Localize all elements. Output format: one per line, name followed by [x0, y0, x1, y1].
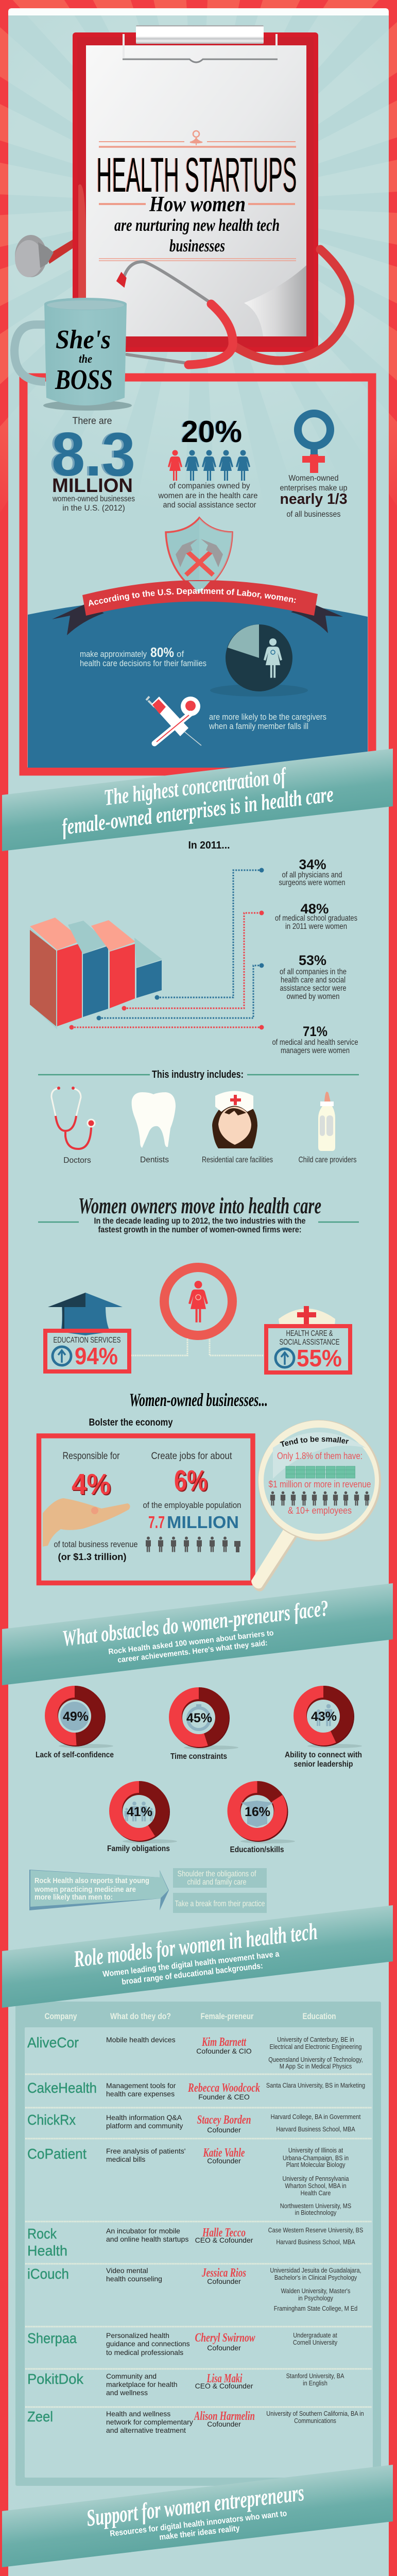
stat: 53 percent: health care and social — [281, 976, 346, 985]
row: copatient: Health Care — [301, 2190, 331, 2197]
text: caregivers: when a family member falls ill — [209, 721, 308, 731]
blue dome — [28, 598, 368, 768]
row: rock health: Halle Tecco — [202, 2226, 246, 2240]
stat: 4 percent: Responsible for — [63, 1451, 120, 1462]
row: cakehealth — [27, 2080, 365, 2101]
row: chickrx: Health information Q&A — [106, 2113, 182, 2122]
stat: nearly one third: Women-owned — [288, 474, 339, 483]
table header — [44, 2011, 336, 2021]
row: zeel — [27, 2409, 364, 2434]
stat: 34 percent: of all physicians and — [282, 871, 342, 879]
row: sherpaa: guidance and connections — [106, 2340, 190, 2348]
donut chart: senior leadership 43 percent — [295, 1687, 362, 1748]
icon: tooth — [132, 1092, 176, 1148]
stat: 6 percent: 7.7 — [148, 1513, 165, 1532]
callout: shoulder obligations — [173, 1868, 267, 1888]
callout: health care and social assistance: HEALTH CARE & — [286, 1329, 333, 1338]
stat: 34 percent: 34% — [299, 857, 326, 872]
clipboard — [73, 25, 318, 352]
metal clip — [123, 25, 278, 62]
row: rock health: Harvard Business School, MBA — [276, 2239, 355, 2246]
callout: health care and social assistance — [266, 1306, 350, 1372]
row: chickrx: Harvard College, BA in Government — [271, 2113, 361, 2121]
row: alivecor: Electrical and Electronic Engineering — [269, 2043, 362, 2050]
banner: role models: broad range of educational backgrounds: — [122, 1961, 264, 1987]
row: zeel: University of Southern California, BA in — [266, 2410, 364, 2417]
row: icouch: Jessica Rios — [201, 2266, 246, 2280]
banner: support for women entrepreneurs — [2, 2465, 393, 2567]
label: family obligations: Family obligations — [107, 1844, 170, 1853]
stat: 80 percent of decisions — [80, 645, 206, 668]
stat: 34 percent — [279, 857, 345, 887]
row: copatient: Wharton School, MBA in — [285, 2182, 347, 2190]
text: total business revenue — [54, 1539, 138, 1562]
row: pokitdok: Lisa Maki — [206, 2372, 243, 2385]
heading: women-owned businesses: Women-owned businesses... — [129, 1389, 268, 1410]
icon: baby bottle — [318, 1092, 335, 1151]
stat: 20 percent — [158, 415, 257, 510]
heading: women owners move into health care — [38, 1193, 359, 1234]
mug text — [55, 325, 113, 395]
title block — [96, 131, 297, 261]
row: chickrx: Stacey Borden — [197, 2113, 251, 2127]
stat: 48 percent: in 2011 were women — [285, 922, 347, 931]
row: sherpaa: to medical professionals — [106, 2348, 183, 2357]
row: cakehealth: Management tools for — [106, 2081, 176, 2090]
stat: 53 percent: owned by women — [286, 992, 340, 1001]
page curl — [244, 265, 306, 336]
icon: crossed syringe and thermometer — [146, 697, 201, 745]
stat: 53 percent: of all companies in the — [280, 968, 347, 976]
row: rock health: Health — [27, 2243, 67, 2259]
stat: nearly one third: enterprises make up — [280, 484, 347, 493]
row: copatient: Urbana-Champaign, BS in — [283, 2155, 349, 2162]
donut chart: senior leadership 43 percent: 43% — [311, 1709, 337, 1724]
callout: shoulder obligations: child and family care — [187, 1878, 247, 1887]
row: icouch: Bachelor's in Clinical Psychology — [274, 2274, 357, 2281]
icon: up arrow — [275, 1349, 294, 1367]
row: copatient: CoPatient — [27, 2146, 87, 2162]
row: rock health: Rock — [27, 2226, 57, 2242]
row: alivecor: AliveCor — [27, 2035, 79, 2050]
table header: Female-preneur — [201, 2011, 254, 2021]
pictogram: seven money stacks — [286, 1466, 355, 1478]
row: chickrx: Harvard Business School, MBA — [276, 2126, 355, 2133]
row: chickrx — [27, 2112, 361, 2134]
stat: 80 percent of decisions: 80% — [150, 645, 174, 660]
label: doctors: Doctors — [63, 1156, 91, 1165]
row: sherpaa: Undergraduate at — [293, 2332, 337, 2339]
stat: 80 percent of decisions: of — [177, 649, 184, 659]
row: pokitdok: in English — [303, 2380, 327, 2387]
row: sherpaa: Personalized health — [106, 2331, 169, 2340]
row: copatient: Northwestern University, MS — [280, 2202, 351, 2210]
row: rock health: Case Western Reserve University, BS — [268, 2227, 363, 2234]
donut chart: education skills 16 percent: 16% — [245, 1805, 270, 1819]
row: cakehealth: health care expenses — [106, 2090, 175, 2098]
row: copatient: Cofounder — [207, 2157, 241, 2165]
ribbon: according to the department of labor: According to the U.S. Department of Labor, women: — [89, 588, 296, 606]
row: sherpaa: Cofounder — [207, 2344, 241, 2352]
label: time constraints: Time constraints — [170, 1752, 227, 1761]
row: pokitdok: PokitDok — [27, 2371, 84, 2387]
donut chart: education skills 16 percent — [229, 1782, 295, 1843]
label: dentists: Dentists — [140, 1156, 169, 1164]
icon: magnifying glass: Tend to be smaller — [280, 1436, 349, 1447]
stat: 71 percent: managers were women — [281, 1046, 350, 1055]
row: rock health: CEO & Cofounder — [195, 2236, 253, 2244]
stat: 48 percent: 48% — [301, 901, 329, 917]
row: icouch — [27, 2266, 361, 2312]
stat: 20 percent: 20% — [181, 415, 242, 449]
label: education skills: Education/skills — [230, 1845, 284, 1854]
stat: 80 percent of decisions: make approximately — [80, 649, 147, 659]
banner: what obstacles — [2, 1583, 393, 1685]
mug text: BOSS — [55, 364, 113, 395]
subheading: How women — [149, 193, 246, 216]
icon: magnifying glass: $1 million or more in revenue — [269, 1479, 371, 1489]
row: pokitdok — [27, 2371, 344, 2397]
row: alivecor: Queensland University of Technology, — [268, 2056, 363, 2063]
icon: female symbol divider top — [99, 131, 296, 147]
callout: education services: 94% — [75, 1343, 118, 1369]
callout arrow: rock health also reports — [29, 1870, 169, 1910]
icon: stethoscope — [51, 1087, 95, 1149]
row: icouch: Video mental — [106, 2266, 148, 2275]
stat: 6 percent — [143, 1451, 241, 1532]
row: copatient: Free analysis of patients' — [106, 2147, 185, 2155]
callout: health care and social assistance: SOCIAL ASSISTANCE — [279, 1338, 340, 1347]
banner: highest concentration — [2, 749, 393, 851]
subheading: are nurturing new health tech — [114, 216, 280, 235]
stat: 20 percent: of companies owned by — [169, 482, 250, 490]
table header: Education — [303, 2011, 336, 2021]
banner: role models — [2, 1905, 393, 2008]
label: senior leadership: senior leadership — [294, 1760, 353, 1769]
row: cakehealth: Rebecca Woodcock — [187, 2081, 260, 2095]
banner: role models: Women leading the digital health movement have a — [102, 1950, 280, 1979]
donut chart: family obligations 41 percent — [110, 1782, 177, 1843]
row: alivecor — [27, 2035, 363, 2070]
row: pokitdok: Stanford University, BA — [286, 2372, 344, 2380]
row: chickrx: Cofounder — [207, 2126, 241, 2134]
row: chickrx: platform and community — [106, 2122, 183, 2130]
stat: 8.3 million: There are — [72, 416, 112, 427]
stat: 20 percent: women are in the health care — [158, 492, 257, 500]
row: alivecor: M App Sc in Medical Physics — [280, 2063, 352, 2070]
donut chart: family obligations 41 percent: 41% — [127, 1805, 152, 1819]
icon: magnifying glass: Only 1.8% of them have: — [277, 1451, 363, 1461]
text: caregivers: are more likely to be the caregivers — [209, 712, 326, 722]
heading: bolster the economy: Bolster the economy — [89, 1417, 173, 1428]
ribbon: according to the department of labor — [52, 580, 343, 635]
icon: woman in pie — [264, 638, 282, 678]
donut chart: time constraints 45 percent — [170, 1688, 238, 1750]
callout arrow: rock health also reports: women practicing medicine are — [34, 1885, 136, 1894]
row: cakehealth: CakeHealth — [27, 2080, 97, 2096]
panel: bolster the economy — [39, 1436, 253, 1583]
callout: health care and social assistance: 55% — [297, 1345, 342, 1371]
heading: women owners move into health care: fastest growth in the number of women-owned firms were: — [98, 1225, 302, 1234]
callout: shoulder obligations: Shoulder the obligations of — [177, 1870, 256, 1878]
bar chart: 3D bars — [30, 918, 162, 1029]
pictogram: ten employees — [270, 1492, 369, 1505]
row: copatient: University of Pennsylvania — [283, 2175, 349, 2182]
stat: 4 percent — [63, 1451, 120, 1502]
icon: open hand — [43, 1498, 130, 1547]
row: icouch: Universidad Jesuita de Guadalajara, — [270, 2267, 361, 2274]
stat: nearly one third: nearly 1/3 — [280, 491, 347, 507]
row: zeel: and alternative treatment — [106, 2426, 186, 2434]
label: senior leadership: Ability to connect with — [285, 1751, 362, 1759]
stat: 71 percent — [272, 1024, 358, 1055]
row: zeel: Alison Harmelin — [194, 2410, 255, 2423]
donut chart: lack of self-confidence 49 percent — [46, 1687, 113, 1748]
stat: 53 percent: 53% — [299, 953, 326, 968]
row: sherpaa — [27, 2330, 337, 2357]
row: sherpaa: Cornell University — [293, 2339, 337, 2346]
icon: magnifying glass: & 10+ employees — [288, 1505, 352, 1516]
icon: nurse head — [212, 1091, 257, 1148]
row: alivecor: Cofounder & CIO — [196, 2047, 252, 2055]
row: copatient: University of Illinois at — [288, 2147, 343, 2154]
row: icouch: Framingham State College, M Ed — [274, 2305, 357, 2312]
connectors: cream dotted — [131, 1338, 263, 1355]
stat: 71 percent: of medical and health service — [272, 1038, 358, 1047]
paper sheet — [86, 45, 306, 336]
subheading — [99, 193, 296, 261]
row: copatient: Katie Vahle — [203, 2146, 245, 2160]
row: icouch: health counseling — [106, 2275, 162, 2283]
stat: 6 percent: MILLION — [167, 1513, 239, 1532]
callout: education services — [45, 1293, 129, 1371]
icon: female symbol — [298, 413, 331, 473]
table header: What do they do? — [110, 2011, 171, 2021]
subheading: businesses — [169, 236, 225, 256]
text: total business revenue: of total business revenue — [54, 1539, 138, 1549]
banner: what obstacles: Rock Health asked 100 women about barriers to — [108, 1629, 274, 1656]
icon: nurse cap — [279, 1306, 335, 1328]
stat: 48 percent: of medical school graduates — [275, 914, 357, 923]
stat: 80 percent of decisions: health care decisions for their families — [80, 658, 206, 668]
stat: 6 percent: Create jobs for about — [151, 1451, 232, 1462]
stat: 6 percent: 6% — [174, 1464, 208, 1497]
banner: support for women entrepreneurs: Resources for digital health innovators who want to — [110, 2509, 287, 2538]
row: rock health: and online health startups — [106, 2235, 188, 2243]
donut chart: time constraints 45 percent: 45% — [186, 1711, 212, 1725]
connectors: dotted lines to statistics — [69, 868, 264, 1029]
row: icouch: Cofounder — [207, 2277, 241, 2285]
stat: nearly one third: of all businesses — [286, 510, 341, 519]
text: total business revenue: (or $1.3 trillion) — [58, 1552, 127, 1562]
mug text: the — [79, 352, 92, 365]
row: icouch: Walden University, Master's — [281, 2287, 350, 2295]
callout arrow: rock health also reports: Rock Health also reports that young — [34, 1876, 149, 1885]
row: rock health: An incubator for mobile — [106, 2227, 180, 2235]
banner: support for women entrepreneurs: make their ideas reality — [159, 2524, 240, 2542]
text: caregivers — [209, 712, 326, 731]
row: icouch: iCouch — [27, 2266, 69, 2282]
panel: role models table — [15, 2002, 381, 2486]
row: alivecor: Kim Barnett — [201, 2036, 247, 2049]
callout: take a break — [173, 1893, 267, 1913]
stat: 8.3 million: women-owned businesses — [52, 495, 135, 503]
row: copatient: Plant Molecular Biology — [286, 2161, 346, 2168]
row: sherpaa: Cheryl Swirnow — [195, 2331, 255, 2345]
label: lack of self-confidence: Lack of self-confidence — [36, 1751, 114, 1759]
stat: 34 percent: surgeons were women — [279, 878, 345, 887]
callout: take a break: Take a break from their practice — [175, 1900, 265, 1908]
row: zeel: network for complementary — [106, 2418, 193, 2426]
row: zeel: Communications — [294, 2417, 336, 2425]
pictogram: five women, one red — [168, 450, 250, 481]
row: pokitdok: CEO & Cofounder — [195, 2382, 253, 2390]
banner: what obstacles: career achievements. Here's what they said: — [117, 1638, 268, 1665]
stat: 6 percent: 6% — [175, 1465, 209, 1498]
table header: Company — [44, 2011, 77, 2021]
stat: 4 percent: 4% — [72, 1468, 111, 1501]
stethoscope chest piece (behind clipboard) — [15, 235, 77, 277]
stat: 20 percent: 20% — [180, 415, 241, 449]
row: rock health — [27, 2226, 363, 2259]
donut chart: lack of self-confidence 49 percent: 49% — [63, 1709, 89, 1724]
icon: graduation cap — [48, 1293, 123, 1335]
panel: red framed statistics block — [24, 377, 372, 772]
stat: nearly one third — [280, 413, 347, 519]
stat: 48 percent — [275, 901, 357, 931]
icon: up arrow — [53, 1347, 71, 1365]
row: pokitdok: and wellness — [106, 2388, 148, 2397]
label: residential care: Residential care facilities — [202, 1156, 273, 1164]
icon: woman in red ring — [164, 1267, 232, 1335]
row: icouch: in Psychology — [298, 2295, 333, 2302]
banner: highest concentration: The highest concentration of — [102, 763, 288, 810]
icon: shield with crossed hammers — [166, 518, 232, 594]
row: alivecor: Mobile health devices — [106, 2036, 176, 2044]
icon: magnifying glass — [251, 1420, 381, 1591]
callout arrow: rock health also reports: more likely than men to: — [34, 1893, 113, 1902]
mug text: She's — [56, 325, 111, 354]
row: cakehealth: Founder & CEO — [198, 2093, 250, 2101]
stat: 53 percent: assistance sector were — [280, 984, 346, 993]
heading: in 2011: In 2011... — [188, 840, 230, 851]
row: copatient — [27, 2146, 351, 2216]
row: alivecor: University of Canterbury, BE in — [277, 2036, 354, 2043]
stat: 8.3 million: 8.3 — [51, 420, 135, 489]
stat: 20 percent: and social assistance sector — [163, 501, 256, 510]
stat: 53 percent — [280, 953, 347, 1001]
stat: 8.3 million: MILLION — [52, 475, 133, 497]
row: zeel: Cofounder — [207, 2420, 241, 2428]
row: sherpaa: Sherpaa — [27, 2330, 77, 2346]
row: zeel: Zeel — [27, 2409, 53, 2425]
row: pokitdok: Community and — [106, 2372, 157, 2380]
row: pokitdok: marketplace for health — [106, 2380, 178, 2388]
label: child care: Child care providers — [299, 1156, 357, 1164]
stat: 8.3 million: 8.3 — [49, 420, 133, 489]
label: senior leadership — [285, 1751, 362, 1769]
stat: 4 percent: 4% — [73, 1469, 112, 1502]
row: cakehealth: Santa Clara University, BS in Marketing — [266, 2082, 365, 2089]
icon: she's the boss mug — [14, 298, 132, 411]
pictogram: 7.7 people — [146, 1536, 240, 1552]
stat: 8.3 million: in the U.S. (2012) — [62, 504, 125, 513]
row: chickrx: ChickRx — [27, 2112, 76, 2128]
row: zeel: Health and wellness — [106, 2410, 170, 2418]
stethoscope tubing — [118, 249, 350, 365]
row: copatient: in Biotechnology — [295, 2209, 336, 2216]
callout: education services: EDUCATION SERVICES — [54, 1336, 120, 1345]
row: copatient: medical bills — [106, 2155, 145, 2163]
heading: women owners move into health care: In the decade leading up to 2012, the two industries with the — [94, 1216, 306, 1226]
heading: this industry includes: This industry includes: — [152, 1069, 244, 1080]
pie chart: 80 percent — [210, 624, 308, 697]
stat: 6 percent: of the employable population — [143, 1500, 241, 1510]
heading: health startups — [96, 148, 297, 202]
stat: 71 percent: 71% — [303, 1024, 327, 1039]
